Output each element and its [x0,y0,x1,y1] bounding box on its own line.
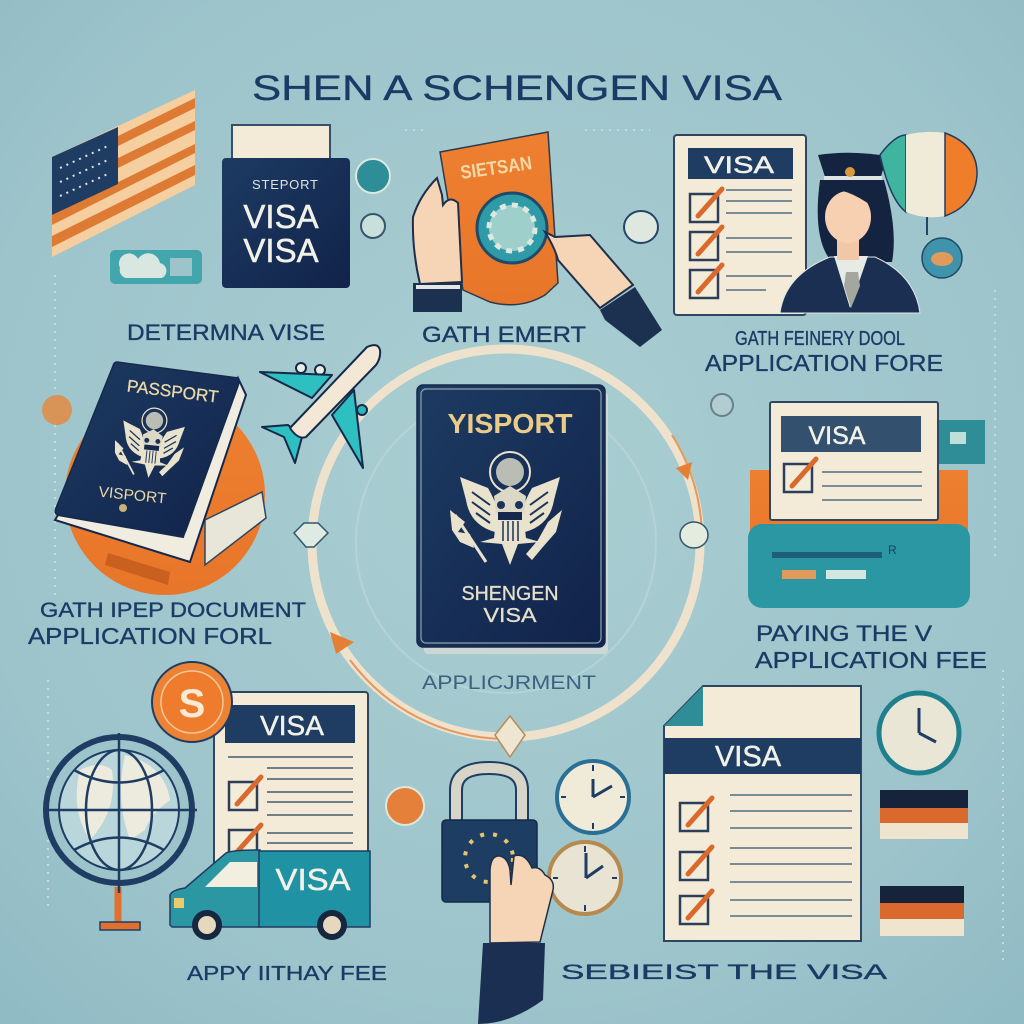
label: gather documents application form: GATH FEINERY DOOL [735,328,905,350]
icon: delivery van: VISA [276,862,351,897]
icon: clocks [549,761,629,914]
label: gather documents application form [705,328,943,376]
icon: small orange badge [42,395,72,425]
label: paying the application fee [755,621,987,673]
icon: visa form in payment terminal [748,402,985,608]
icon: coin [152,662,232,742]
icon: irish flag circle [880,132,977,278]
label: paying the application fee: PAYING THE V [756,621,932,646]
icon: padlock and hand [442,768,553,1024]
label: gather documents application form left: APPLICATION FORL [28,623,272,649]
ring markers [294,394,733,757]
icon: american flag [52,90,195,257]
panel: visa checklist with van: VISA [260,710,324,741]
icon: german flags [880,790,968,936]
label: gather documents application form left [28,599,306,649]
panel: visa checklist with van [214,692,368,882]
icon: passport with orange circle: PASSPORT [126,377,219,407]
icon: officer [780,153,920,313]
label: submit the visa: SEBIEIST THE VISA [561,961,887,984]
icon: small cloud badge [110,250,202,284]
central ring [312,349,702,739]
label: gather documents application form left: GATH IPEP DOCUMENT [40,599,306,622]
panel: checklist with officer [674,135,806,315]
icon: visa form in payment terminal: R [888,543,897,557]
icon: delivery van [170,850,370,940]
emblem [450,452,562,565]
central passport [417,385,608,654]
icon: passport with orange circle [55,362,266,595]
icon: globe [43,733,197,930]
icon: airplane [260,345,380,468]
icon: hands with orange passport and magnifier: SIETSAN [459,153,533,184]
icon: visa booklet: VISA [243,232,319,269]
icon: visa booklet: VISA [243,198,319,235]
icon: connector dot [624,211,658,243]
label: paying the application fee: APPLICATION FEE [755,647,987,673]
icon: visa booklet [222,125,350,288]
icon: passport with orange circle: VISPORT [98,484,167,508]
icon: hands with orange passport and magnifier [413,132,662,347]
central passport: SHENGEN [462,583,558,605]
icon: coin: S [179,682,205,726]
central passport: YISPORT [448,408,572,439]
title: SHEN A SCHENGEN VISA [252,69,783,108]
icon: wall clock [879,693,959,773]
icon: visa booklet: STEPORT [252,177,318,192]
icon: small teal dots [356,159,390,238]
label: application: APPLICJRMENT [422,673,596,694]
label: gather document: GATH EMERT [422,322,586,347]
central passport: VISA [484,605,537,627]
icon: orange dot [386,787,424,825]
label: apply fee: APPY IITHAY FEE [187,963,387,985]
icon: visa form in payment terminal: VISA [809,422,866,450]
panel: large visa checklist: VISA [715,741,782,773]
label: determine visa: DETERMNA VISE [127,320,325,345]
label: gather documents application form: APPLICATION FORE [705,350,943,376]
panel: checklist with officer: VISA [704,152,774,179]
panel: large visa checklist [664,686,861,941]
